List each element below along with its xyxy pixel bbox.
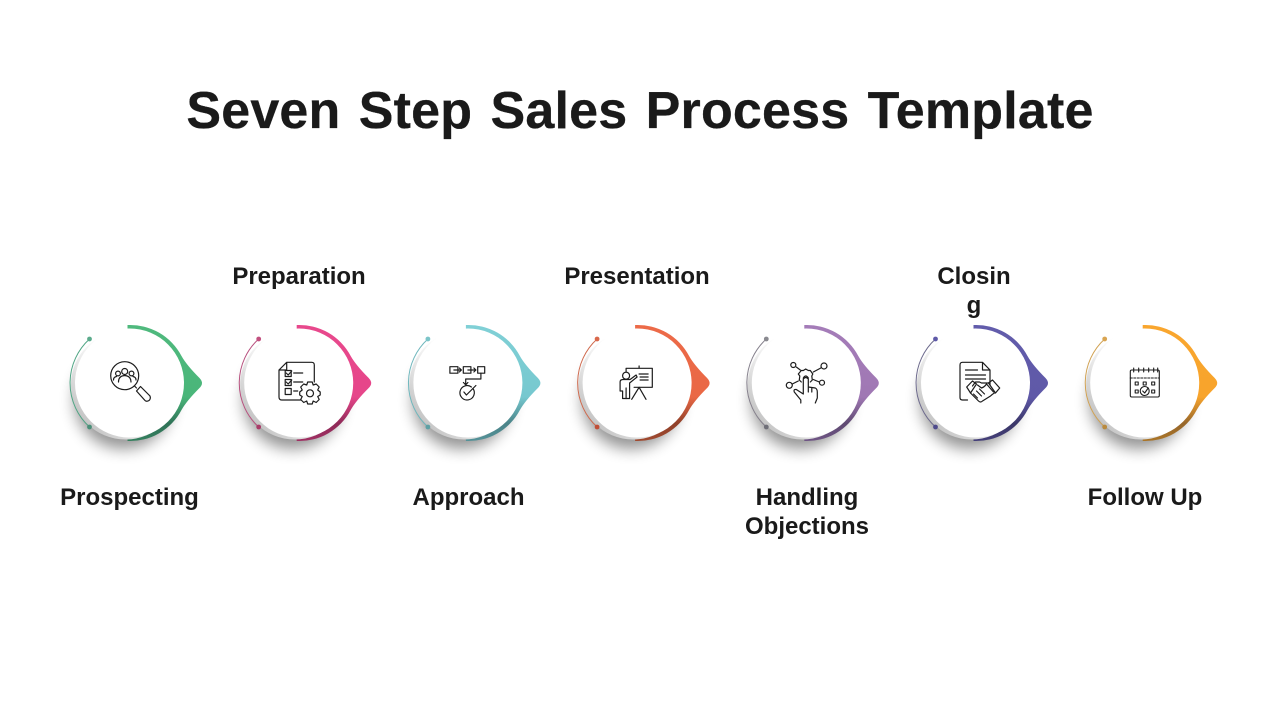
step 7: Follow Up <box>1085 325 1217 511</box>
circle badge: orange <box>578 325 710 449</box>
icon: calendar with check <box>1130 368 1159 397</box>
step 6: Closing <box>916 263 1048 449</box>
label: Presentation <box>564 263 710 290</box>
step 3: Approach <box>408 325 540 511</box>
label: Objections <box>745 513 869 540</box>
label <box>745 484 869 540</box>
circle badge: teal <box>408 325 540 449</box>
step 1: Prospecting <box>60 325 202 511</box>
circle badge: indigo <box>916 325 1048 449</box>
icon: contract and handshake <box>960 362 1000 402</box>
label: g <box>967 292 981 319</box>
label: Closin <box>937 263 1011 290</box>
label: Follow Up <box>1088 484 1202 511</box>
circle badge: pink <box>239 325 371 449</box>
step 2: Preparation <box>232 263 371 449</box>
icon: presenter at board <box>620 366 652 399</box>
label: Prospecting <box>60 484 199 511</box>
icon: hand touching network <box>786 362 827 403</box>
icon: process flow with check <box>450 367 485 400</box>
icon: checklist with gear <box>279 362 320 404</box>
step 5: Handling Objections <box>745 325 879 540</box>
circle badge: purple <box>747 325 879 449</box>
circle badge: amber <box>1085 325 1217 449</box>
step 4: Presentation <box>564 263 710 449</box>
label: Preparation <box>232 263 366 290</box>
title: Seven Step Sales Process Template <box>186 82 1094 140</box>
label: Approach <box>412 484 525 511</box>
icon: magnifier with people <box>111 362 150 401</box>
circle badge: green <box>70 325 202 449</box>
label: Handling <box>756 484 858 511</box>
